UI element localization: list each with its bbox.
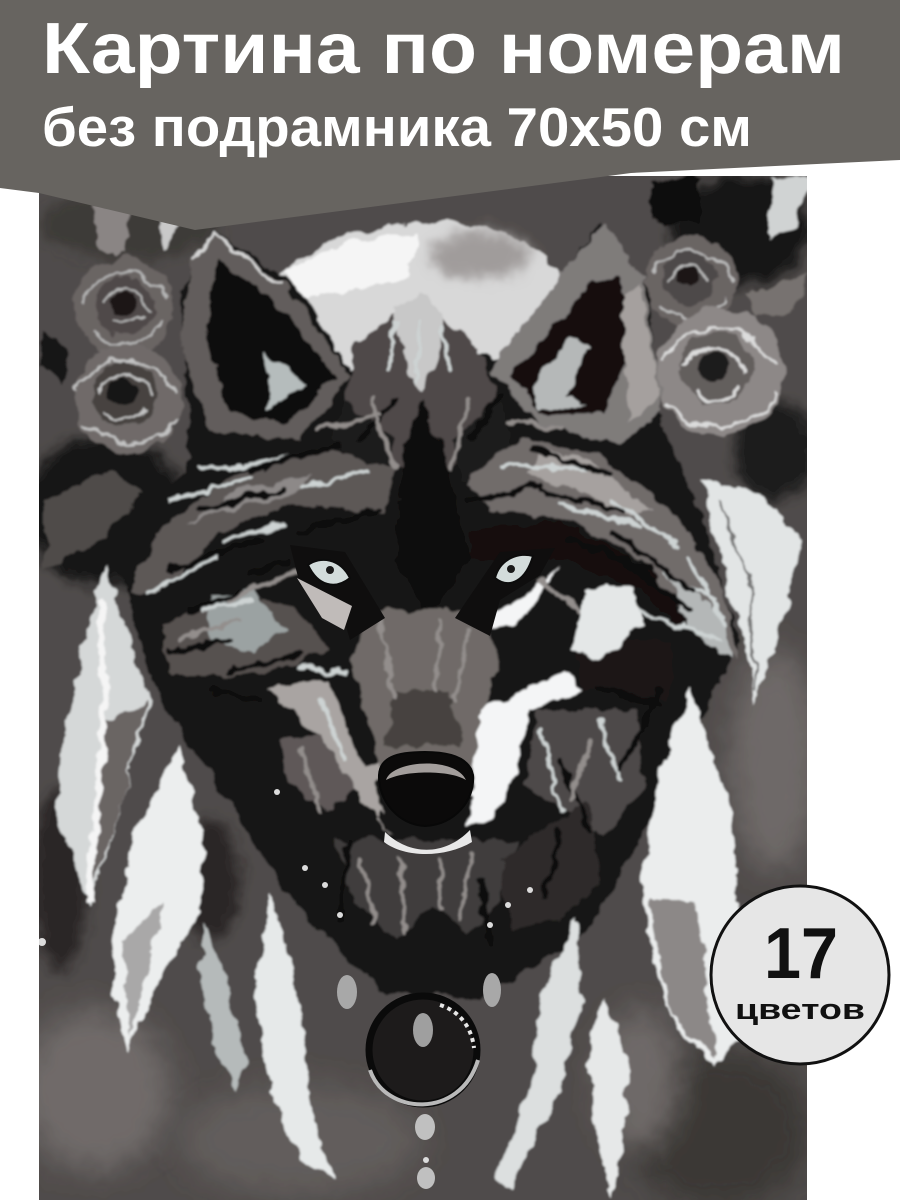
muzzle	[350, 567, 580, 835]
leaves	[40, 176, 810, 570]
background	[39, 176, 807, 1200]
wolf head silhouette	[120, 222, 740, 1000]
dream catcher pendant	[337, 973, 501, 1189]
banner	[0, 0, 900, 230]
rose: lower left	[74, 344, 182, 452]
moon	[278, 217, 561, 373]
brow and cheek: left	[128, 450, 395, 813]
eye: left	[290, 545, 385, 640]
badge: 17 colours: 17	[764, 914, 838, 994]
painterly layer	[39, 176, 807, 1200]
nose	[379, 752, 473, 854]
right ear	[490, 222, 662, 445]
painting: wolf portrait	[39, 176, 807, 1200]
title: Картина по номерам	[42, 9, 845, 89]
beads	[38, 789, 533, 1163]
fur streaks	[148, 322, 725, 940]
rose: lower right	[656, 308, 784, 436]
rose: upper right	[646, 236, 738, 328]
forehead fur	[334, 293, 500, 608]
left ear	[180, 230, 350, 440]
badge: 17 colours	[711, 886, 889, 1064]
brow and cheek: right	[465, 440, 738, 837]
feathers right	[495, 480, 802, 1195]
feathers left	[56, 565, 335, 1180]
eye: right	[455, 554, 548, 636]
neck fur	[335, 800, 600, 940]
badge: 17 colours: цветов	[735, 994, 865, 1026]
subtitle: без подрамника 70х50 см	[42, 96, 752, 158]
rose: upper left	[74, 258, 174, 358]
